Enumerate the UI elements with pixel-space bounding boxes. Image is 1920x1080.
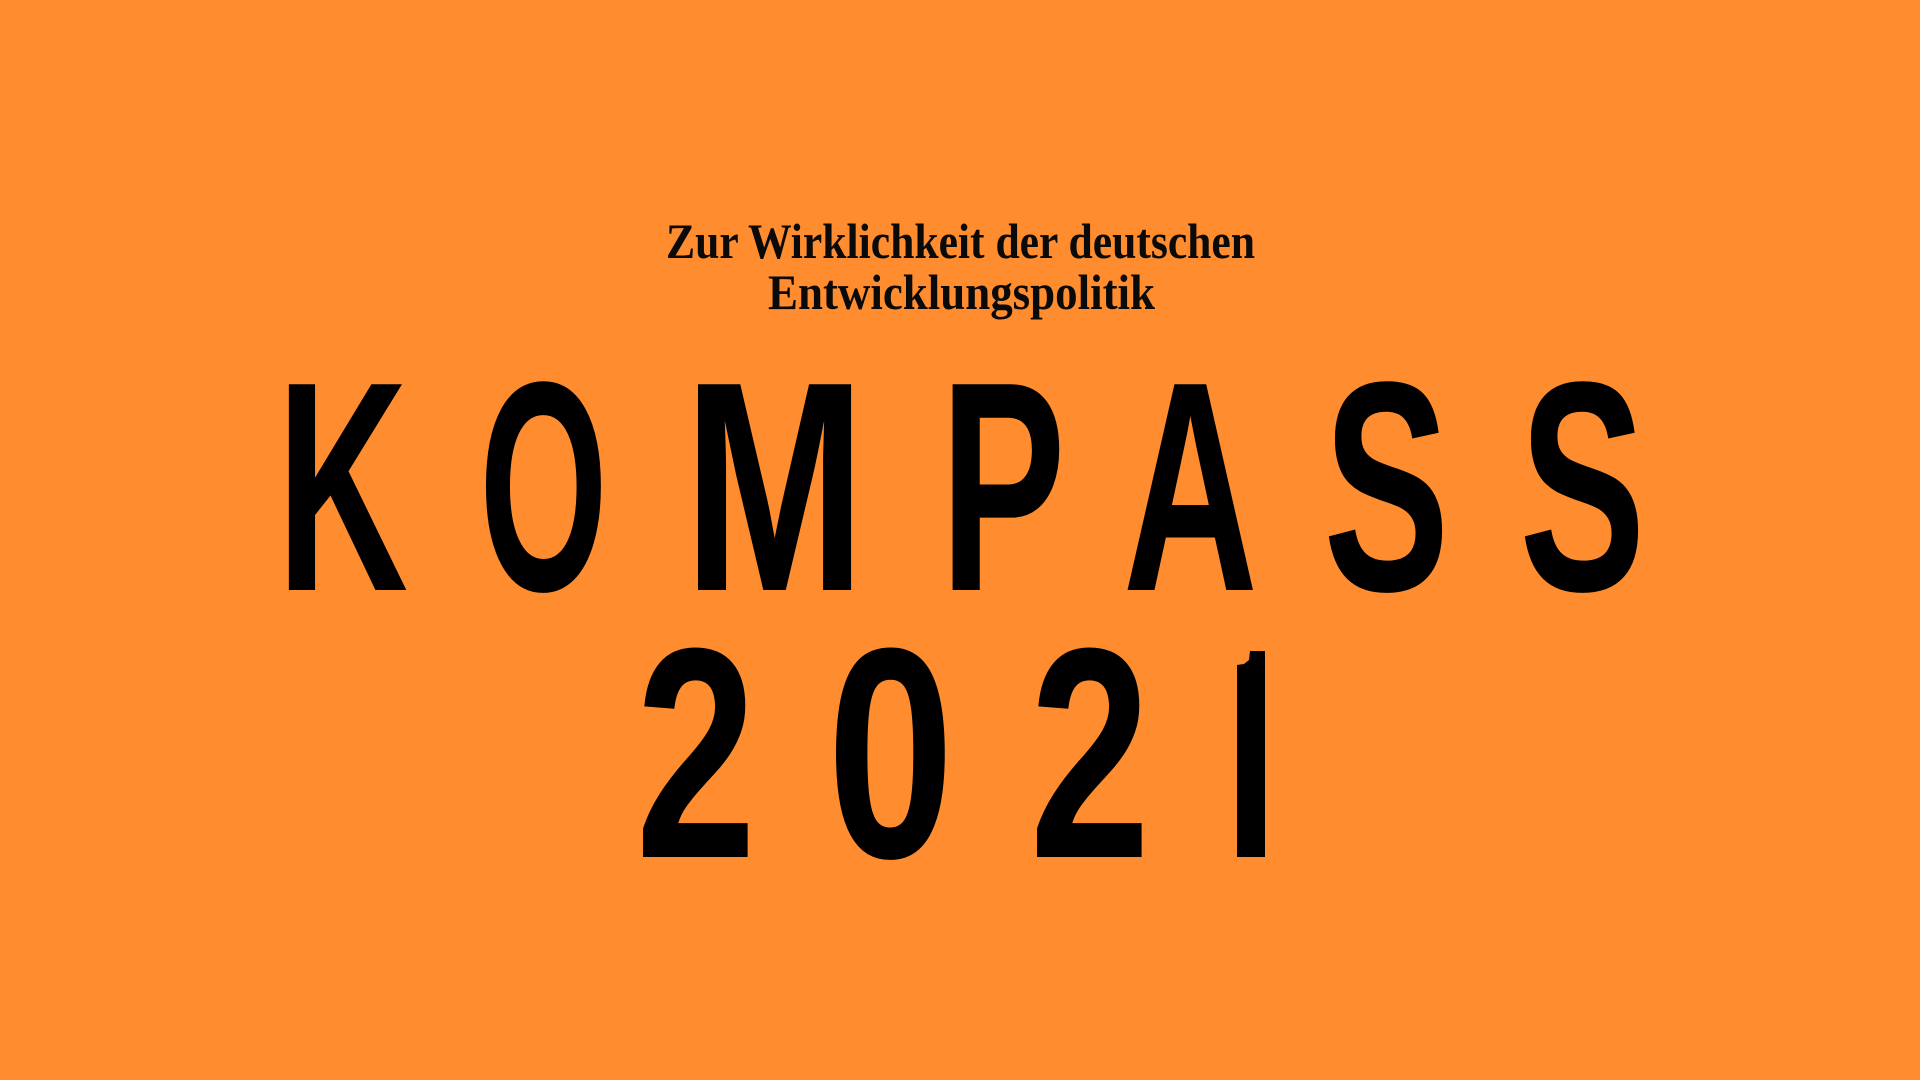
title: KOMPASS: S — [1323, 320, 1449, 653]
title: year 2021: 2 — [636, 587, 756, 921]
subtitle — [666, 213, 1255, 320]
title: KOMPASS: O — [479, 320, 608, 654]
subtitle: Entwicklungspolitik — [768, 264, 1155, 320]
title: KOMPASS — [277, 319, 1645, 654]
title: year 2021: 2 — [1030, 587, 1150, 921]
subtitle: Zur Wirklichkeit der deutschen — [666, 213, 1255, 269]
title: KOMPASS: P — [940, 320, 1066, 653]
title: year 2021: 0 — [827, 586, 954, 921]
title: KOMPASS: K — [277, 321, 408, 654]
title: year 2021: 1 — [1182, 586, 1307, 921]
title: KOMPASS: A — [1123, 319, 1258, 654]
title: year 2021 — [643, 648, 1265, 860]
title: KOMPASS: M — [683, 320, 866, 654]
title: KOMPASS: S — [1519, 320, 1645, 653]
